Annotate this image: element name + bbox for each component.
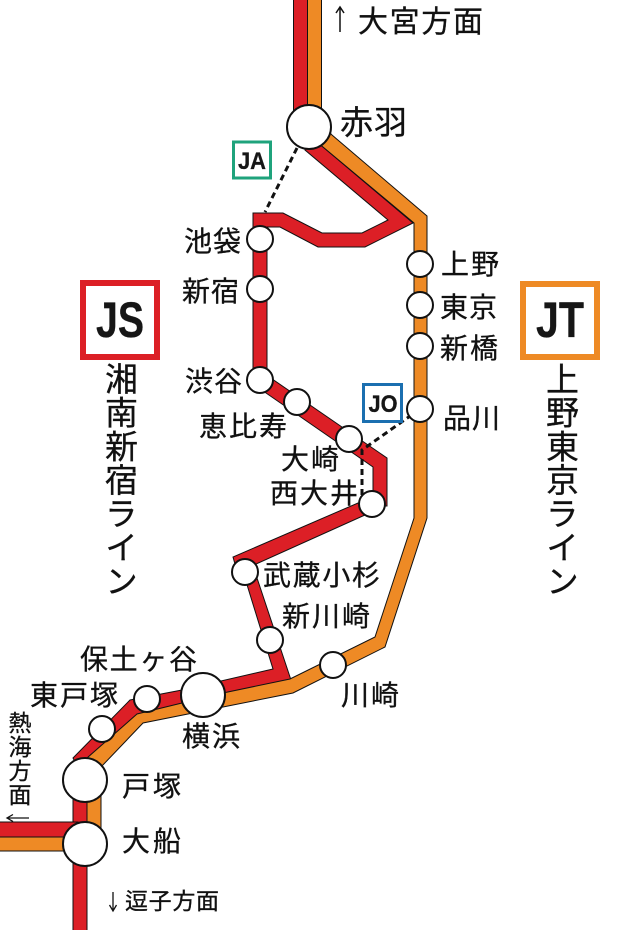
station: Kawasaki <box>320 652 346 678</box>
line name: Ueno-Tokyo: 上野東京ライン <box>542 362 578 597</box>
station: Ofuna <box>63 822 107 866</box>
station: Shinjuku <box>247 276 273 302</box>
label: Tokyo: 東京 <box>440 292 497 323</box>
station: Osaki <box>336 426 362 452</box>
line name: Shonan-Shinjuku: 湘南新宿ライン <box>100 362 138 597</box>
label: Akabane: 赤羽 <box>340 104 407 141</box>
label: Musashi-Kosugi: 武蔵小杉 <box>263 560 380 591</box>
station: Shibuya <box>247 367 273 393</box>
station: Ueno <box>407 251 433 277</box>
station: Tokyo <box>407 292 433 318</box>
label: Osaki: 大崎 <box>281 444 339 475</box>
badge: JT <box>523 284 597 357</box>
label: Hodogaya: 保土ヶ谷 <box>80 644 197 675</box>
label: Ebisu: 恵比寿 <box>199 411 287 442</box>
station: Shin-Kawasaki <box>257 627 283 653</box>
station: Ebisu <box>284 389 310 415</box>
connector: JA <box>265 148 297 212</box>
label: Shimbashi: 新橋 <box>440 333 498 364</box>
label: Ofuna: 大船 <box>122 826 181 857</box>
station: Hodogaya <box>134 686 160 712</box>
arrow: up <box>336 7 344 32</box>
station: Totsuka <box>63 758 107 802</box>
label: Shin-Kawasaki: 新川崎 <box>282 601 370 632</box>
badge: JA <box>234 142 270 178</box>
label: Ikebukuro: 池袋 <box>184 226 241 257</box>
badge: JT: JT <box>536 292 584 348</box>
Shonan-Shinjuku line (red) <box>0 0 413 930</box>
badge: JO <box>364 384 402 422</box>
label: Totsuka: 戸塚 <box>122 771 181 802</box>
label: Shibuya: 渋谷 <box>185 366 242 397</box>
station: Nishi-Oi <box>359 491 385 517</box>
badge: JO: JO <box>368 391 398 418</box>
station: Musashi-Kosugi <box>232 559 258 585</box>
station: Shimbashi <box>407 333 433 359</box>
badge: JA: JA <box>238 148 266 175</box>
station: Akabane <box>287 105 331 149</box>
Ueno-Tokyo line (orange) <box>0 0 427 851</box>
direction: Atami: 熱海方面 <box>5 711 32 806</box>
badge: JS: JS <box>96 292 144 348</box>
direction: Zushi: 逗子方面 <box>125 888 219 914</box>
label: Higashi-Totsuka: 東戸塚 <box>30 680 118 711</box>
direction: Omiya: 大宮方面 <box>358 6 483 39</box>
station: Shinagawa <box>407 396 433 422</box>
station: Ikebukuro <box>247 226 273 252</box>
label: Shinagawa: 品川 <box>443 403 500 434</box>
badge: JS <box>83 283 157 357</box>
label: Ueno: 上野 <box>441 249 499 280</box>
label: Kawasaki: 川崎 <box>341 680 399 711</box>
connector: JO <box>362 409 420 495</box>
station: Higashi-Totsuka <box>89 716 115 742</box>
arrow: left <box>7 814 29 822</box>
label: Nishi-Oi: 西大井 <box>270 478 358 509</box>
stations <box>63 105 433 866</box>
station: Yokohama <box>181 673 225 717</box>
label: Yokohama: 横浜 <box>182 721 240 752</box>
label: Shinjuku: 新宿 <box>182 276 239 307</box>
arrow: down <box>110 892 116 911</box>
